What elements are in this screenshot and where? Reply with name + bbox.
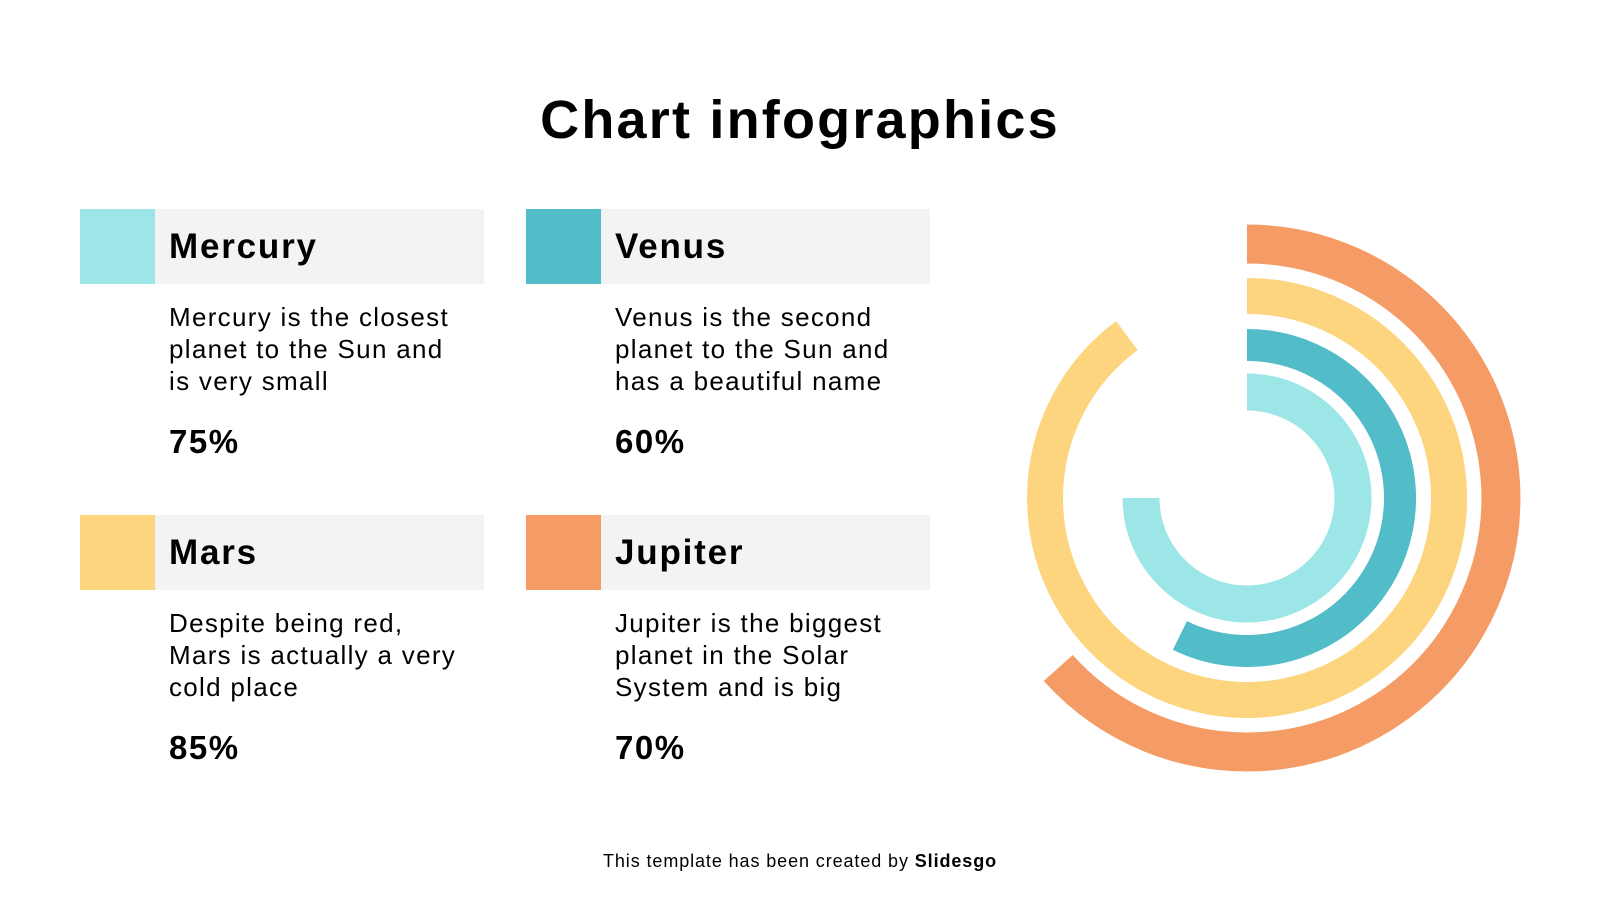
panel: mercury <box>80 209 484 460</box>
header: mars: Mars <box>169 533 258 572</box>
arc: mercury 75% <box>1141 392 1353 604</box>
header: mercury <box>80 209 484 284</box>
text: jupiter: planet in the Solar <box>615 640 849 670</box>
value: venus: 60% <box>615 423 686 460</box>
text: mars: cold place <box>169 672 299 702</box>
text: venus: Venus is the second <box>615 302 872 332</box>
title: Chart infographics <box>540 90 1060 150</box>
value: mars: 85% <box>169 729 240 766</box>
text: venus <box>615 302 890 396</box>
header: mercury: Mercury <box>169 227 318 266</box>
footer credit: This template has been created by Slidesgo <box>603 851 997 871</box>
text: mercury <box>169 302 449 396</box>
text: mercury: is very small <box>169 366 329 396</box>
text: jupiter <box>615 608 882 702</box>
header: venus <box>526 209 930 284</box>
value: mercury: 75% <box>169 423 240 460</box>
header: jupiter: Jupiter <box>615 533 744 572</box>
arc: mars 85% <box>1045 296 1449 700</box>
header: mars <box>80 515 484 590</box>
text: venus: has a beautiful name <box>615 366 882 396</box>
header: venus: Venus <box>615 227 727 266</box>
arc: venus 60% <box>1180 345 1400 651</box>
text: venus: planet to the Sun and <box>615 334 890 364</box>
arc: jupiter 70% <box>1058 244 1501 752</box>
text: mercury: planet to the Sun and <box>169 334 444 364</box>
panel: mars <box>80 515 484 766</box>
text: jupiter: Jupiter is the biggest <box>615 608 882 638</box>
value: jupiter: 70% <box>615 729 686 766</box>
panel: jupiter <box>526 515 930 766</box>
text: jupiter: System and is big <box>615 672 842 702</box>
text: mars: Despite being red, <box>169 608 403 638</box>
text: mars: Mars is actually a very <box>169 640 456 670</box>
panel: venus <box>526 209 930 460</box>
header: jupiter <box>526 515 930 590</box>
text: mercury: Mercury is the closest <box>169 302 449 332</box>
text: mars <box>169 608 456 702</box>
